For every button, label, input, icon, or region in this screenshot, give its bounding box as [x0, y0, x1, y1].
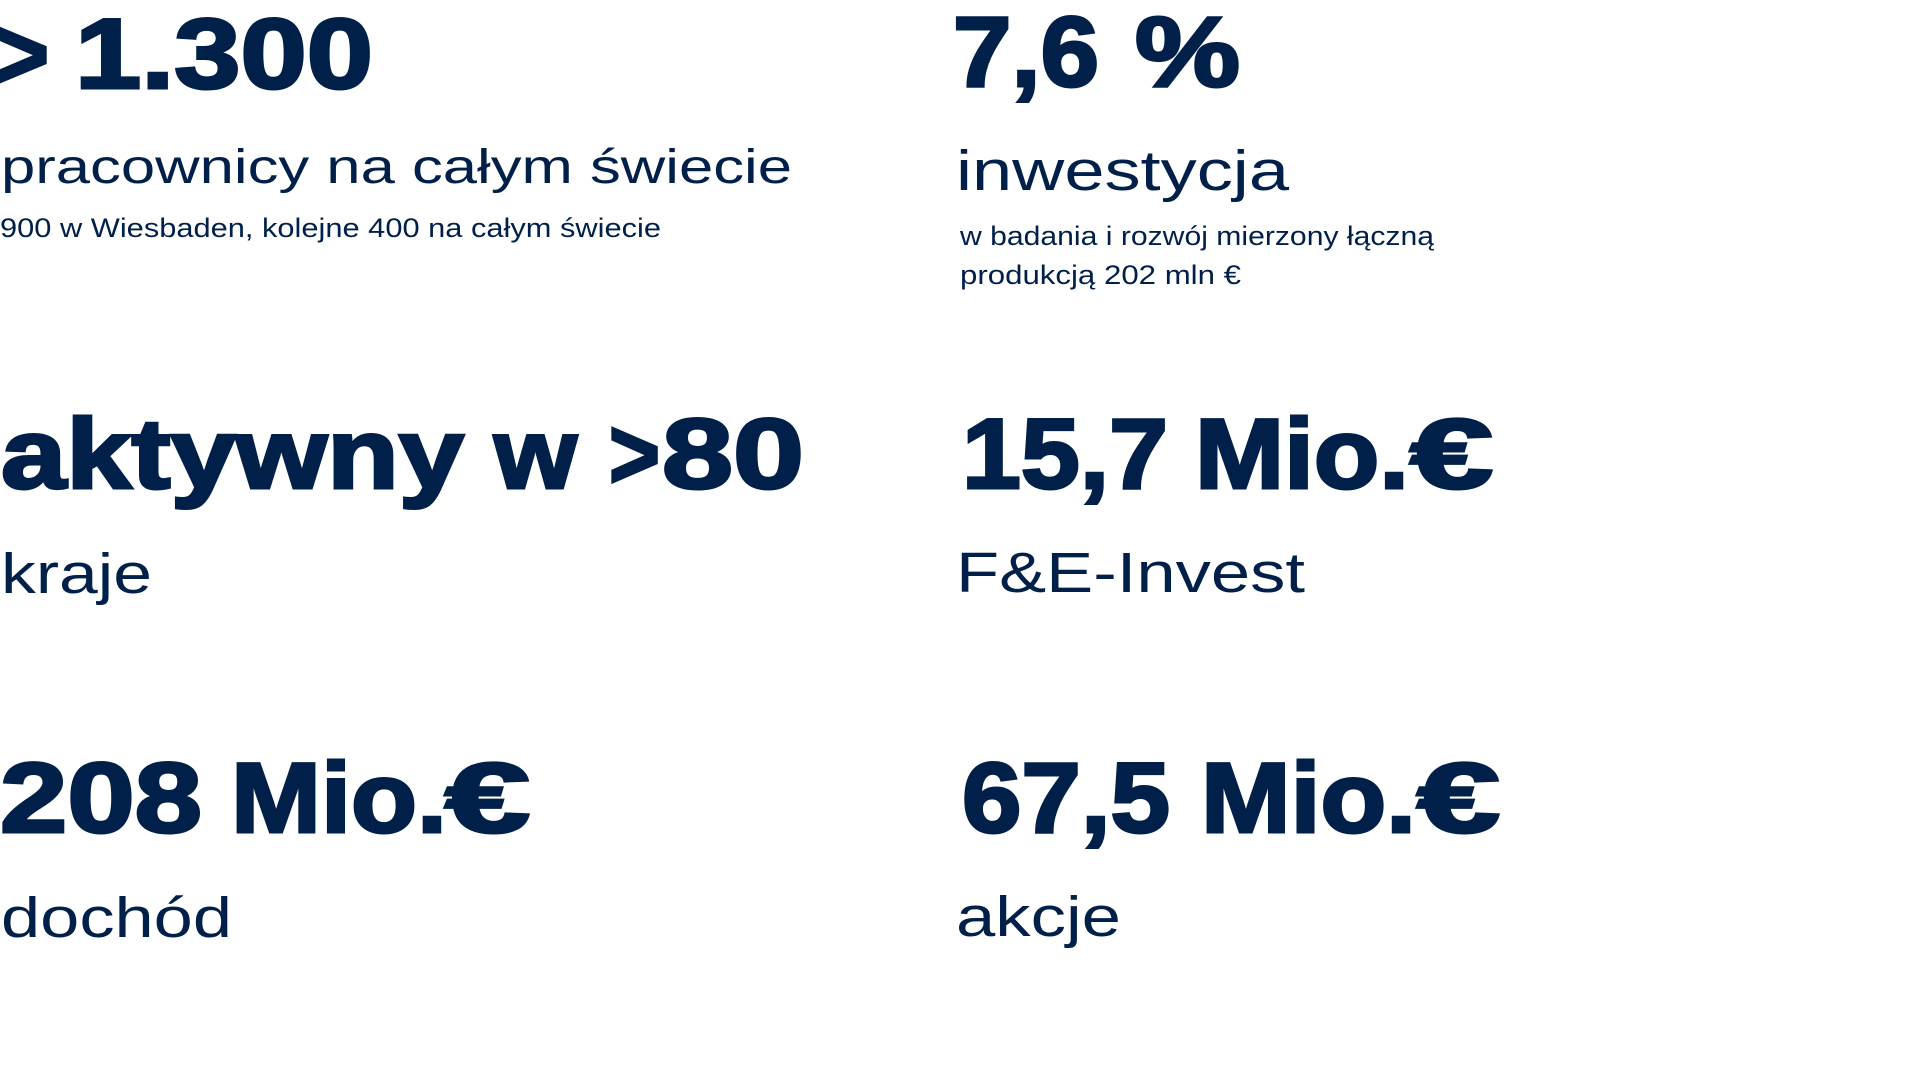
big number: 67.5 million euro: Mio. — [1201, 742, 1416, 853]
big number: 208 million euro: € — [445, 742, 530, 853]
big number: 15.7 million euro: 15,7 — [962, 398, 1168, 509]
big number: more than 1300: 1.300 — [75, 0, 373, 109]
big number: 67.5 million euro: € — [1417, 742, 1500, 853]
big text: active in more than 80: > — [609, 398, 660, 509]
big number: 208 million euro: Mio. — [231, 742, 447, 853]
big text: active in more than 80 — [1, 398, 804, 509]
big number: 15.7 million euro: € — [1410, 398, 1493, 509]
label: countries: kraje — [1, 542, 152, 606]
big number: more than 1300 — [0, 0, 373, 109]
stat block: shares — [956, 742, 1500, 949]
big number: 15.7 million euro — [962, 398, 1493, 509]
big text: active in more than 80: 80 — [662, 398, 804, 509]
big number: 208 million euro: 208 — [0, 742, 202, 853]
big text: active in more than 80: w — [493, 398, 578, 509]
note: employee split: 900 w Wiesbaden, kolejne 400 na całym świecie — [0, 213, 661, 243]
label: income: dochód — [1, 886, 232, 950]
big number: 15.7 million euro: Mio. — [1195, 398, 1409, 509]
big text: active in more than 80: aktywny — [1, 398, 464, 509]
stat block: income — [0, 742, 530, 950]
big number: 67.5 million euro: 67,5 — [962, 742, 1170, 853]
stat block: countries — [1, 398, 804, 606]
note: R&D investment detail second line: produkcją 202 mln € — [960, 260, 1241, 290]
stat block: R&D investment — [956, 398, 1493, 605]
stat block: employees — [0, 0, 792, 243]
label: shares: akcje — [956, 885, 1121, 949]
label: employees worldwide: pracownicy na całym świecie — [1, 141, 792, 194]
label: R&D invest: F&E-Invest — [956, 541, 1305, 605]
big number: 208 million euro — [0, 742, 530, 853]
label: investment: inwestycja — [956, 139, 1289, 203]
big number: 7.6 percent — [953, 0, 1240, 107]
big number: 67.5 million euro — [962, 742, 1500, 853]
note: R&D investment detail: w badania i rozwój mierzony łączną — [959, 221, 1435, 251]
stat block: R&D share — [953, 0, 1435, 290]
